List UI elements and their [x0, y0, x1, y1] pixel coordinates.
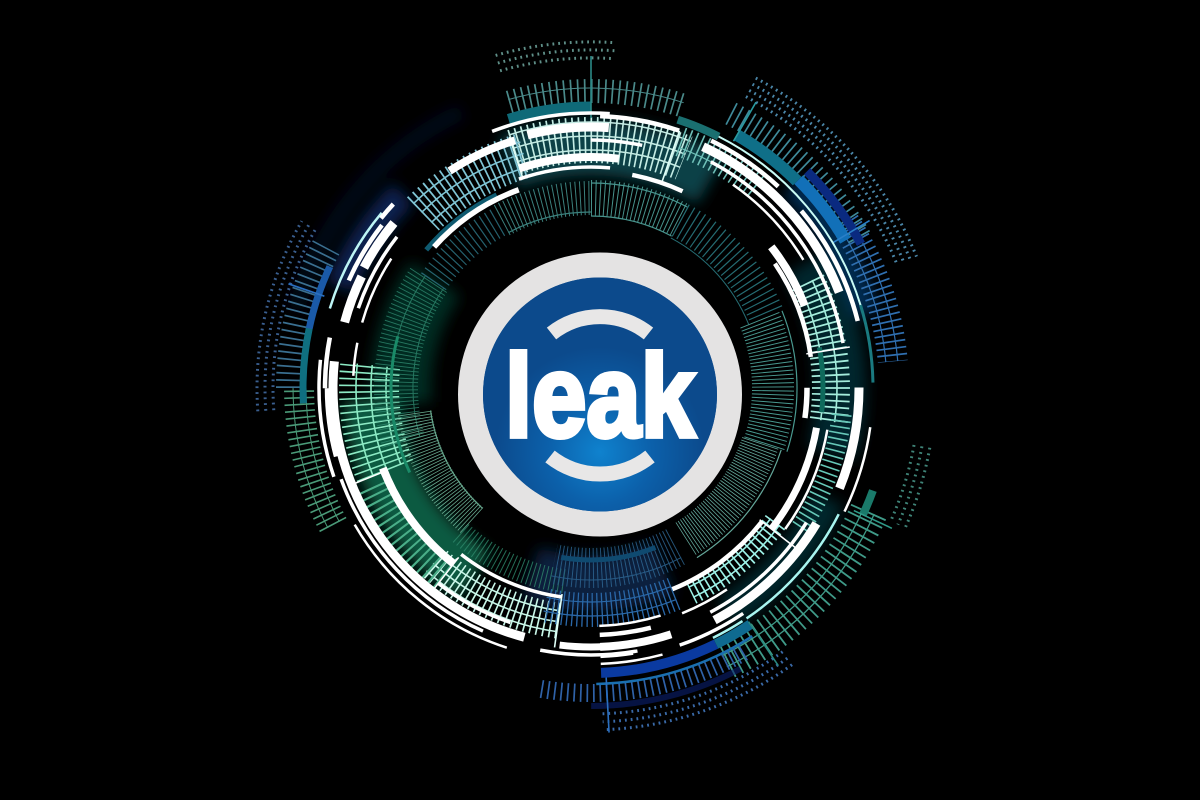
badge: light outer ring: [458, 252, 742, 536]
radial separator lines: [288, 56, 892, 733]
logo: bottom arc: [550, 456, 650, 474]
logo: wordmark: leak: [505, 330, 696, 462]
logo: top arc: [552, 317, 648, 334]
inner tick rings: [357, 178, 832, 615]
middle bright grids: [332, 82, 872, 647]
white arcs: upper left and top: [316, 113, 866, 663]
radial ring artwork: [245, 23, 955, 777]
white arcs: upper right: [309, 106, 873, 670]
outer grid ticks: [262, 53, 928, 750]
white arcs: left and lower left: [318, 115, 864, 661]
logo badge: [458, 252, 742, 536]
badge: blue disc: [483, 278, 717, 512]
colour glows behind the rings: [286, 83, 896, 693]
outer dotted ring segments: [245, 23, 955, 777]
badge: blue highlight: [483, 278, 717, 512]
solid coloured bands: [273, 70, 909, 706]
white arcs: lower right and bottom: [309, 106, 873, 670]
